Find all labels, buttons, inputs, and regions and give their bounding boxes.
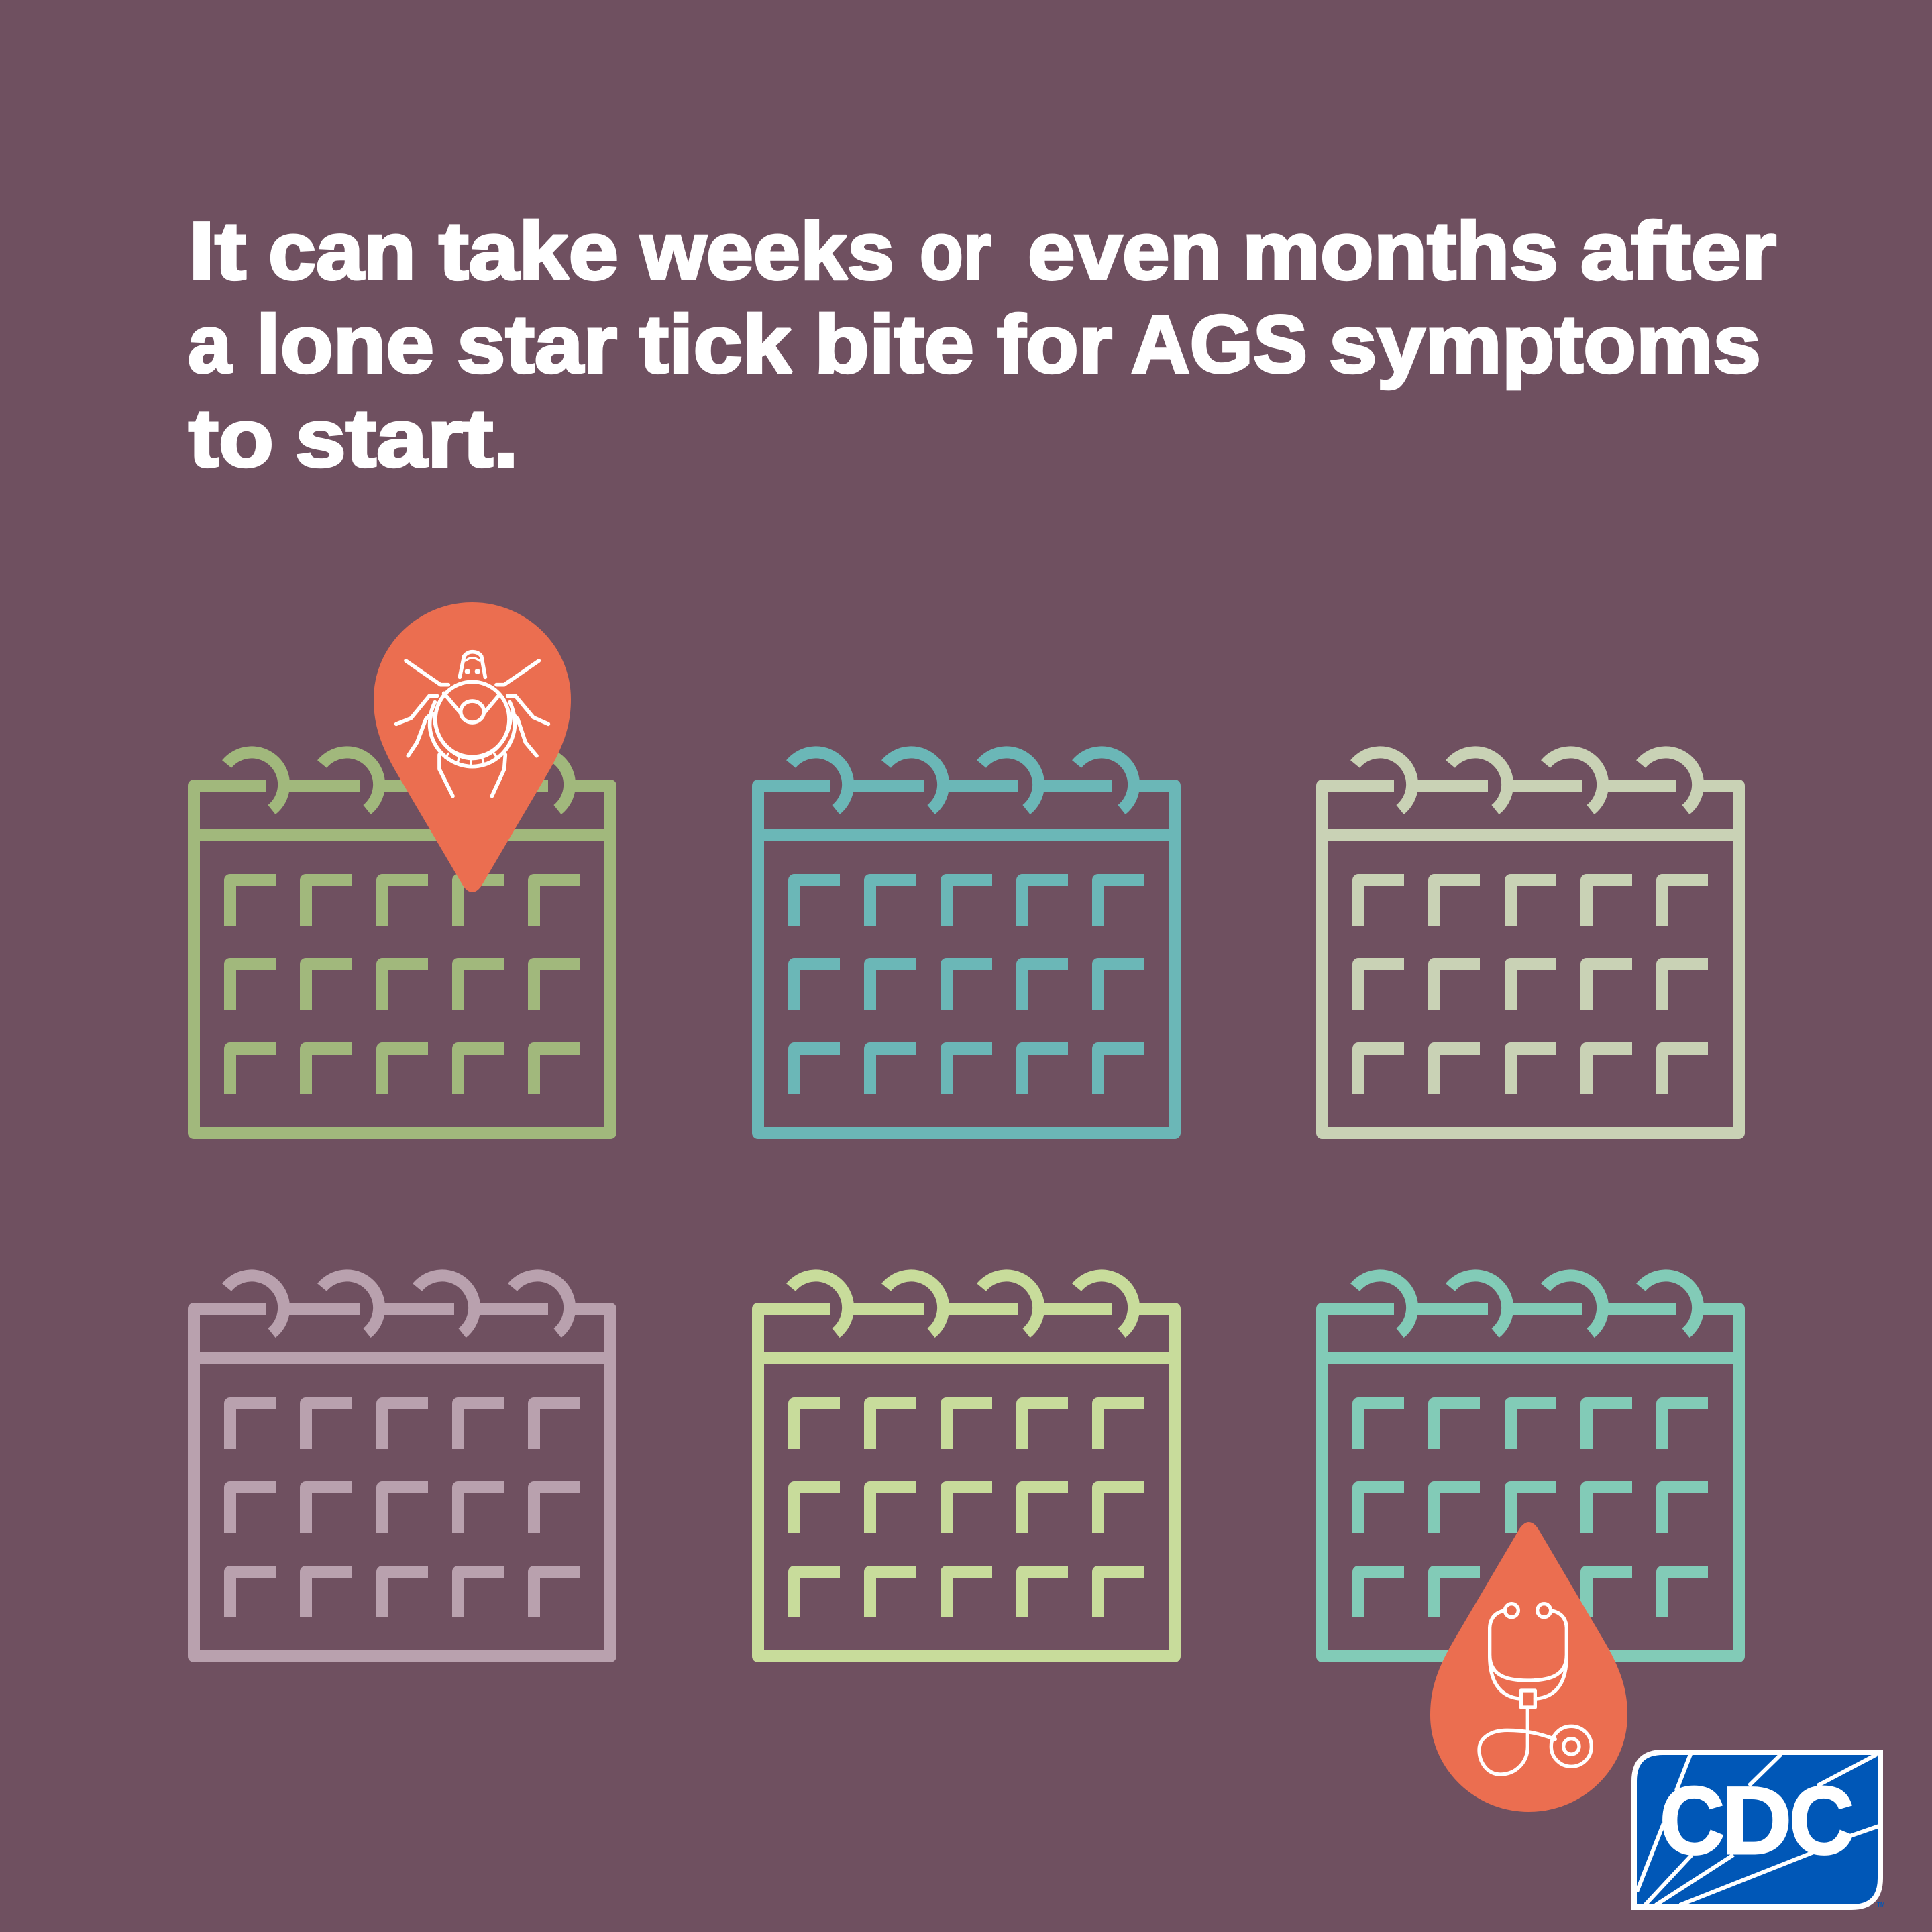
title: lone [256, 299, 434, 390]
calendar 1: green [188, 752, 616, 1133]
title: bite [814, 299, 974, 390]
title: tick [639, 299, 792, 390]
title: even [1028, 205, 1222, 297]
title: weeks [640, 205, 894, 297]
calendar 3: pale sage [1316, 752, 1745, 1133]
title: for [997, 299, 1112, 390]
calendar 4: mauve [188, 1275, 616, 1656]
CDC logo: D [1721, 1768, 1792, 1874]
title: symptoms [1329, 299, 1761, 390]
title: after [1580, 205, 1776, 297]
title [188, 205, 1776, 484]
title: a [188, 299, 232, 390]
blood drop with stethoscope icon [1430, 1522, 1627, 1812]
icon: tick [396, 652, 548, 796]
title: AGS [1131, 299, 1307, 390]
calendar 2: teal [752, 752, 1181, 1133]
calendar 5: light green [752, 1275, 1181, 1656]
CDC logo [1634, 1752, 1885, 1908]
title: can [268, 205, 416, 297]
CDC logo: C [1660, 1768, 1725, 1874]
title: start. [295, 392, 519, 484]
title: months [1242, 205, 1558, 297]
CDC logo: TM [1877, 1902, 1885, 1908]
icon: stethoscope [1479, 1604, 1591, 1774]
title: or [920, 205, 991, 297]
map pin with tick icon [374, 602, 571, 892]
CDC logo: C [1789, 1768, 1854, 1874]
title: It [189, 205, 246, 297]
title: take [439, 205, 619, 297]
calendar 6: mint [1316, 1275, 1745, 1656]
title: to [189, 392, 274, 484]
title: star [457, 299, 617, 390]
